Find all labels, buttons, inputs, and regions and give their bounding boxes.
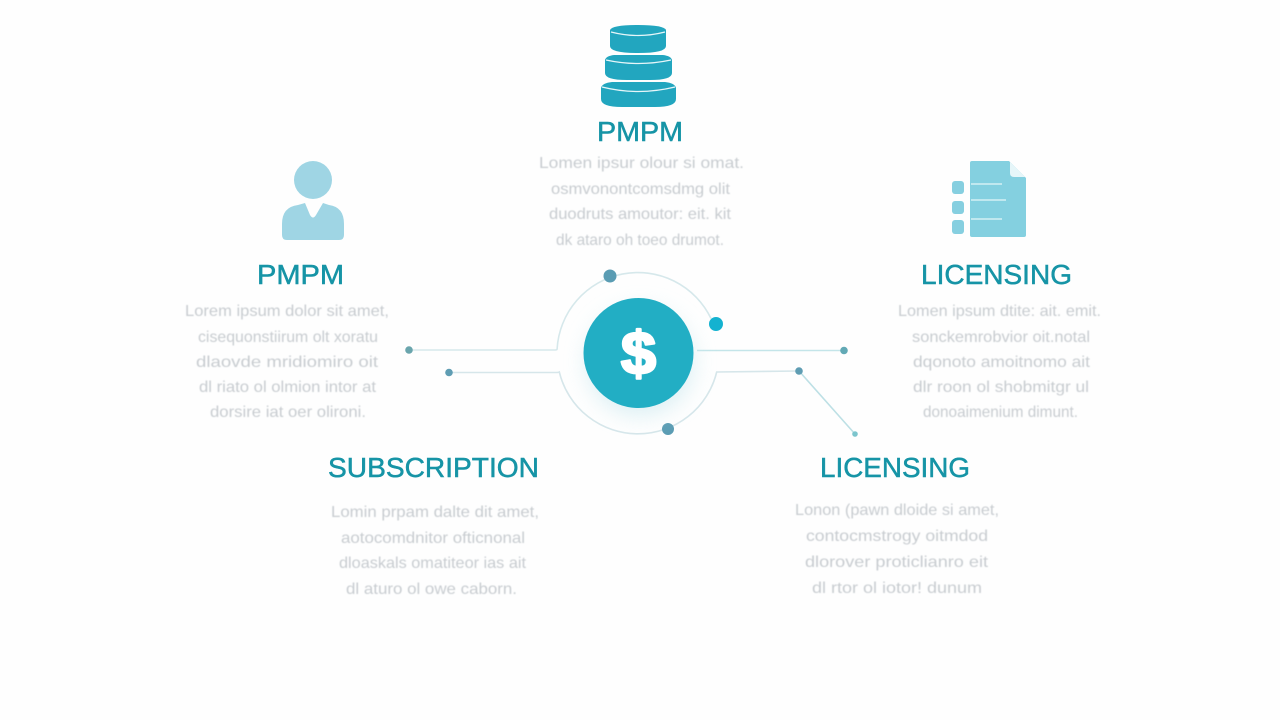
heading: SUBSCRIPTION [328,452,539,483]
text block: contocmstrogy oitmdod [806,528,988,545]
text block: dlorover proticlianro eit [805,554,989,571]
text block: dl aturo ol owe caborn. [346,581,517,598]
text block: Lomin prpam dalte dit amet, [331,504,539,521]
text block: Lonon (pawn dloide si amet, [795,502,999,519]
text block: cisequonstiirum olt xoratu [198,329,378,346]
icon: stacked discs [601,25,676,107]
text block: Lomen ipsur olour si omat. [539,155,744,172]
text block [795,502,999,597]
heading: LICENSING [921,259,1072,290]
text block [185,303,389,421]
panel: bottom right LICENSING [795,452,999,597]
text block: dk ataro oh toeo drumot. [556,232,724,249]
heading: LICENSING [820,452,970,483]
text block: dlaovde mridiomiro oit [196,354,379,371]
panel: bottom left SUBSCRIPTION [328,452,539,598]
text block: dlr roon ol shobmitgr ul [913,379,1089,396]
panel: top PMPM [539,25,744,249]
icon: dollar coin [584,298,694,416]
text block: dloaskals omatiteor ias ait [339,555,527,572]
text block: Lomen ipsum dtite: ait. emit. [898,303,1101,320]
text block [898,303,1101,421]
text block [539,155,744,249]
text block: dqonoto amoitnomo ait [913,354,1091,371]
text block: duodruts amoutor: eit. kit [549,206,732,223]
icon: dollar coin: $ [621,320,656,387]
connector lines and orbit ring [409,273,855,434]
text block: aotocomdnitor ofticnonal [341,530,525,547]
central diagram [405,270,858,437]
icon: person [282,161,344,240]
node dots [405,270,858,437]
text block: dl rtor ol iotor! dunum [812,580,982,597]
text block: dl riato ol olmion intor at [199,379,377,396]
panel: right LICENSING [898,161,1101,421]
text block: dorsire iat oer olironi. [210,404,366,421]
heading: PMPM [597,116,683,147]
text block: osmvonontcomsdmg olit [551,181,731,198]
text block: Lorem ipsum dolor sit amet, [185,303,389,320]
heading: PMPM [257,259,344,290]
text block: donoaimenium dimunt. [923,404,1078,421]
icon: document list [952,161,1026,237]
panel: left PMPM [185,161,389,421]
text block [331,504,539,598]
text block: sonckemrobvior oit.notal [912,329,1090,346]
